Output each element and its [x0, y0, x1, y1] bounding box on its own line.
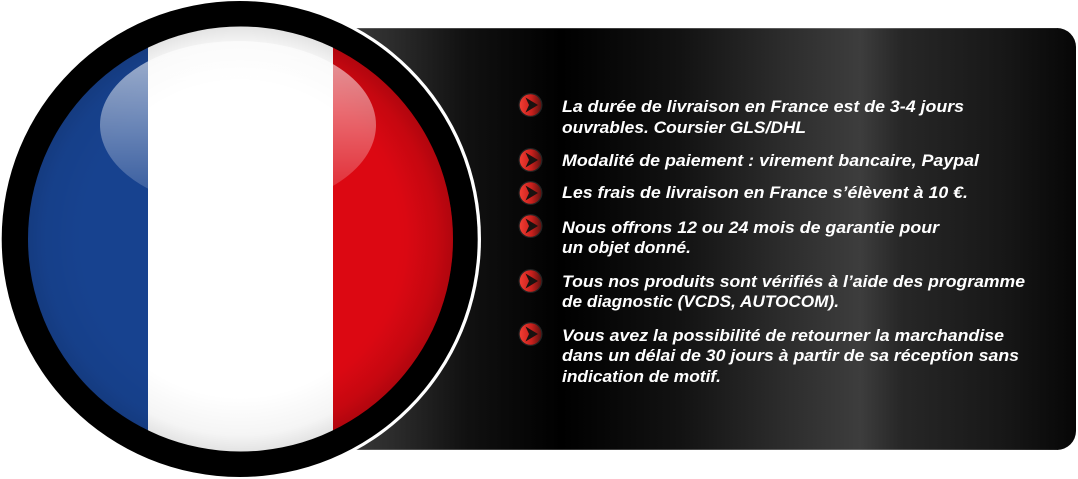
icon: bullet arrow [518, 269, 542, 293]
icon: bullet arrow [518, 214, 542, 238]
icon: bullet arrow [518, 181, 542, 205]
black border [2, 1, 478, 477]
item: returns: Vous avez la possibilité de retourner la marchandise [562, 327, 1004, 345]
item: delivery cost [518, 181, 968, 205]
icon: bullet arrow [518, 322, 542, 346]
item: warranty: Nous offrons 12 ou 24 mois de garantie pour [562, 219, 941, 237]
item: payment: Modalité de paiement : virement bancaire, Paypal [562, 152, 979, 170]
item: warranty [518, 214, 941, 257]
icon: bullet arrow [518, 93, 542, 117]
item: delivery time [518, 93, 964, 137]
item: returns: indication de motif. [562, 368, 721, 386]
white ring [0, 0, 481, 479]
item: diagnostics: Tous nos produits sont vérifiés à l’aide des programme [562, 273, 1025, 291]
item: delivery cost: Les frais de livraison en France s’élèvent à 10 €. [562, 184, 968, 202]
item: delivery time: La durée de livraison en France est de 3-4 jours [562, 98, 964, 116]
item: delivery time: ouvrables. Coursier GLS/DHL [562, 119, 806, 137]
item: warranty: un objet donné. [562, 239, 691, 257]
flag: France [20, 20, 463, 460]
gloss highlight [100, 61, 376, 188]
panel: delivery information [330, 28, 1076, 450]
item: returns [518, 322, 1019, 386]
item: diagnostics [518, 269, 1025, 311]
icon: bullet arrow [518, 148, 542, 172]
item: payment [518, 148, 979, 172]
flag badge [0, 0, 481, 479]
item: returns: dans un délai de 30 jours à partir de sa réception sans [562, 347, 1019, 365]
item: diagnostics: de diagnostic (VCDS, AUTOCOM). [562, 293, 839, 311]
